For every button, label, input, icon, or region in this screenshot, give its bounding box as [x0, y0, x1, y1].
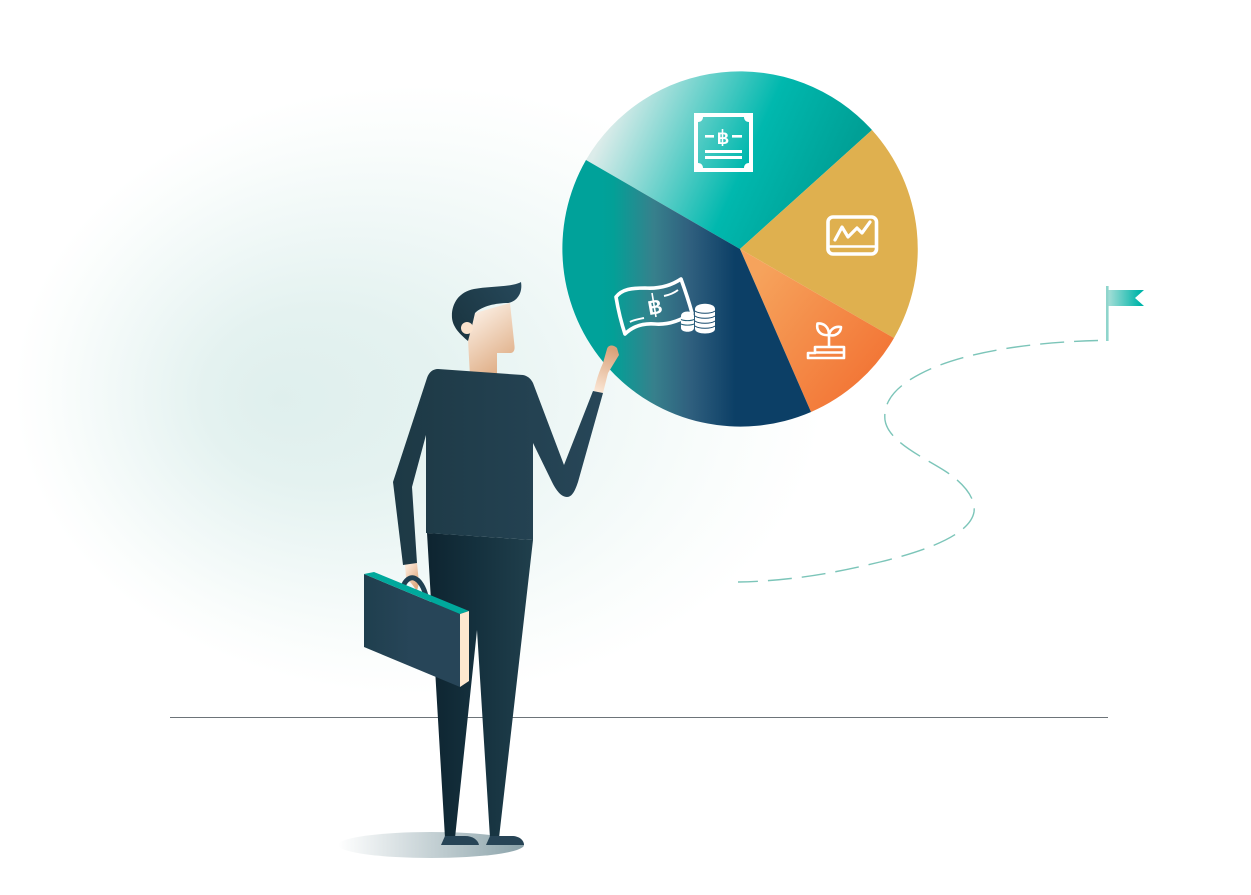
legs — [427, 533, 533, 838]
icon: briefcase — [364, 572, 469, 687]
briefcase handle — [403, 578, 426, 596]
shoes — [441, 836, 524, 845]
large coin stack — [695, 304, 715, 334]
neck and face — [468, 303, 515, 376]
ear — [461, 322, 473, 334]
briefcase front — [364, 574, 460, 687]
briefcase top edge — [364, 572, 469, 614]
icon: certificate — [694, 113, 753, 172]
hair — [452, 282, 521, 341]
ground line — [170, 716, 1108, 718]
icon: chart monitor — [828, 217, 876, 254]
pie chart — [562, 71, 918, 427]
slice: bonds — [586, 71, 872, 249]
slice: startups — [740, 249, 894, 412]
slice: cash — [562, 160, 811, 427]
slice: stocks — [740, 130, 918, 338]
briefcase side edge — [460, 611, 469, 687]
lowered hand — [405, 563, 419, 591]
icon: seedling — [808, 323, 844, 358]
icon: certificate: B — [717, 129, 729, 148]
dashed path to flag — [738, 340, 1098, 582]
raised hand — [594, 345, 619, 393]
figure: businessman — [393, 282, 619, 845]
icon: banknote and coins: B — [646, 296, 664, 320]
icon: flag — [1106, 286, 1144, 341]
small coin stack — [681, 312, 694, 332]
torso and arms — [393, 369, 603, 565]
ground shadow — [338, 832, 524, 858]
icon: banknote and coins — [616, 279, 715, 334]
